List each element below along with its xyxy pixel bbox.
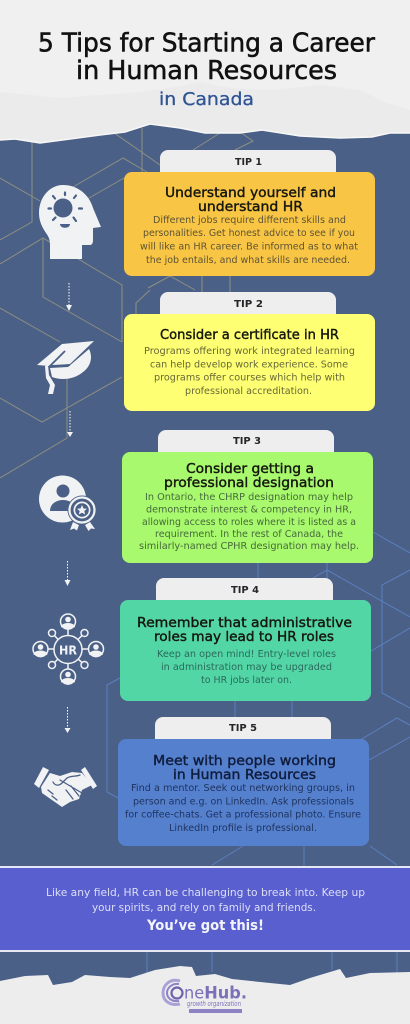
card: tip 5: for coffee-chats. Get a professional photo. Ensure [125, 810, 361, 820]
icon: person with award rosette [39, 476, 96, 531]
card: tip 1: Different jobs require different skills and [153, 215, 346, 226]
title: in Human Resources [76, 56, 337, 86]
banner message: your spirits, and rely on family and friends. [92, 901, 316, 914]
top torn paper [0, 0, 410, 143]
card: tip 2: programs offer courses which help with [154, 372, 345, 384]
card: tip 4 [120, 600, 371, 701]
icon: HR network: HR [59, 642, 77, 658]
card: tip 3: professional designation [164, 476, 334, 491]
card: tip 2: Programs offering work integrated learning [144, 346, 355, 357]
card: tip 2: Consider a certificate in HR [160, 328, 339, 343]
card: tip 5: in Human Resources [173, 768, 316, 783]
card: tip 1: Understand yourself and [165, 186, 336, 201]
card: tip 4: Keep an open mind! Entry-level roles [157, 649, 336, 660]
icon: graduation cap [37, 341, 94, 394]
card: tip 4: Remember that administrative [137, 616, 352, 631]
tab: tip 3: TIP 3 [233, 436, 261, 447]
card: tip 3: requirement. In the rest of Canada, the [155, 529, 343, 540]
arrow: tip 4 to tip 5 [64, 707, 70, 733]
banner [0, 866, 410, 952]
card: tip 3: Consider getting a [186, 462, 314, 477]
logo: OneHub growth organization [163, 980, 247, 1013]
panel: tip 5 [118, 717, 369, 846]
card: tip 5: LinkedIn profile is professional. [169, 823, 317, 834]
card: tip 2: can help develop work experience. Some [150, 360, 348, 370]
card: tip 3: similarly-named CPHR designation may help. [139, 541, 359, 552]
tab: tip 3 [158, 430, 334, 452]
panel: tip 1 [124, 150, 375, 276]
card: tip 1: the job entails, and what skills are needed. [146, 255, 350, 266]
tab: tip 1: TIP 1 [235, 157, 262, 168]
icon: head with lightbulb [39, 185, 101, 259]
tab: tip 4: TIP 4 [231, 585, 259, 596]
card: tip 1: will like an HR career. Be informed as to what [140, 242, 358, 252]
banner message [46, 886, 365, 914]
bottom torn paper [0, 966, 410, 1024]
card: tip 3: demonstrate interest & competency in HR, [146, 504, 352, 516]
icon: HR network [33, 614, 104, 685]
tab: tip 2 [160, 292, 336, 314]
card: tip 3: In Ontario, the CHRP designation may help [145, 492, 353, 503]
card: tip 4: roles may lead to HR roles [154, 630, 334, 645]
arrow: tip 1 to tip 2 [66, 283, 72, 311]
panel: tip 4 [120, 578, 371, 701]
icon: handshake [34, 767, 97, 807]
panel: tip 2 [124, 292, 375, 411]
card: tip 5: Find a mentor. Seek out networking groups, in [131, 783, 355, 794]
tab: tip 5 [155, 717, 331, 739]
banner message: Like any field, HR can be challenging to break into. Keep up [46, 886, 365, 899]
tab: tip 4 [156, 578, 333, 600]
title [38, 28, 375, 86]
panel: tip 3 [122, 430, 373, 563]
card: tip 3: allowing access to roles where it is listed as a [142, 517, 356, 528]
card: tip 3 [122, 452, 373, 563]
card: tip 5: Meet with people working [153, 754, 336, 769]
logo wordmark: neHub. [184, 984, 247, 1004]
card: tip 1: understand HR [198, 200, 303, 215]
card: tip 2: professional accreditation. [185, 386, 312, 397]
card: tip 2 [124, 314, 375, 411]
arrow: tip 2 to tip 3 [67, 411, 73, 437]
card: tip 1: personalities. Get honest advice to see if you [143, 228, 355, 239]
card: tip 4: in administration may be upgraded [161, 662, 332, 673]
title: 5 Tips for Starting a Career [38, 28, 375, 58]
card: tip 5 [118, 739, 369, 846]
logo tagline: growth organization [187, 1000, 241, 1008]
arrow: tip 3 to tip 4 [64, 561, 70, 586]
logo bar [189, 1009, 242, 1013]
card: tip 4: to HR jobs later on. [201, 675, 292, 686]
banner call to action: You’ve got this! [146, 918, 264, 934]
tab: tip 2: TIP 2 [234, 299, 263, 310]
card: tip 1 [124, 172, 375, 276]
logo swirl [163, 980, 182, 1004]
card: tip 5: person and e.g. on LinkedIn. Ask professionals [133, 796, 354, 808]
subtitle: in Canada [159, 89, 254, 110]
tab: tip 5: TIP 5 [229, 723, 257, 734]
tab: tip 1 [160, 150, 336, 172]
